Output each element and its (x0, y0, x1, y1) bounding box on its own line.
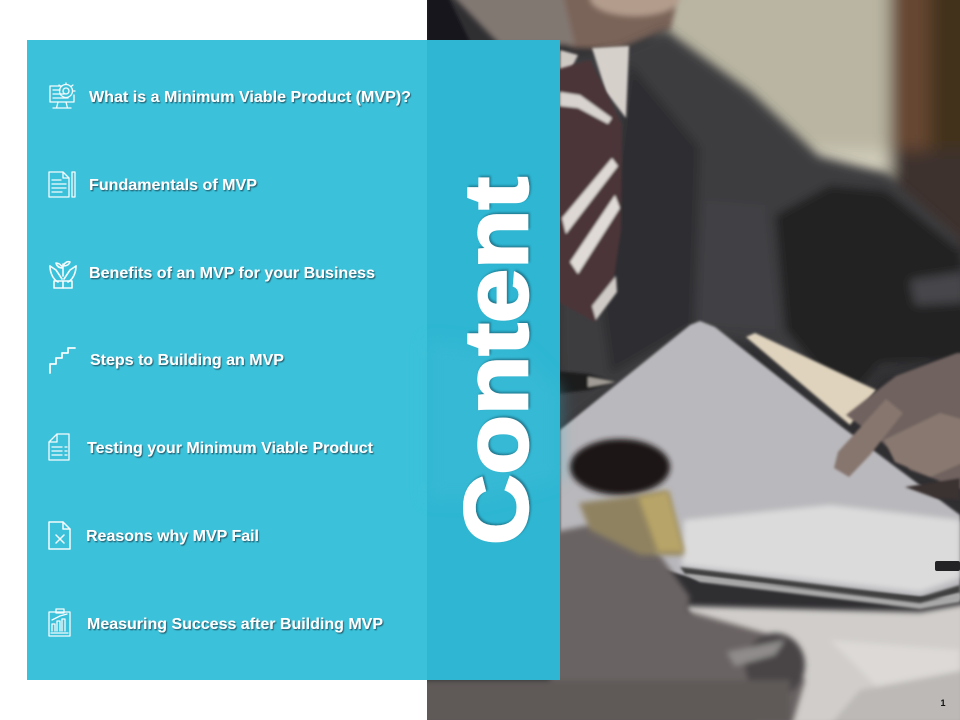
list item 1: What is a Minimum Viable Product: What is a Minimum Viable Product (MVP)? (89, 89, 411, 106)
striped tie (555, 60, 622, 322)
paper stack (560, 321, 960, 609)
list item 5: Testing your Minimum Viable Product (49, 434, 373, 460)
suit jacket (555, 30, 960, 430)
icon: document with cross (49, 522, 70, 549)
list item 4: Steps to Building an MVP (50, 348, 284, 373)
list item 6: Reasons why MVP Fail (49, 522, 259, 549)
list item 5: Testing your Minimum Viable Product: Testing your Minimum Viable Product (87, 440, 373, 457)
list item 6: Reasons why MVP Fail: Reasons why MVP Fail (86, 528, 259, 545)
table surface (684, 604, 960, 720)
pen nib (555, 371, 616, 394)
list item 1: What is a Minimum Viable Product (50, 83, 411, 108)
foreground grey shape (420, 519, 805, 720)
list item 2: Fundamentals of MVP (49, 172, 257, 197)
page number: 1 (940, 698, 946, 708)
background photo: businessman with documents and gavel (420, 0, 960, 720)
hand holding page (834, 353, 960, 500)
gavel (570, 439, 684, 555)
black corner behind collar (427, 0, 470, 42)
shirt collar and neck (447, 0, 680, 50)
list item 3: Benefits of an MVP for your Business: Benefits of an MVP for your Business (89, 265, 375, 282)
window background (660, 0, 960, 250)
list item 4: Steps to Building an MVP: Steps to Building an MVP (90, 352, 284, 369)
yellow notebook (746, 333, 876, 425)
heading: Content: Content (447, 177, 547, 545)
list item 2: Fundamentals of MVP: Fundamentals of MVP (89, 177, 257, 194)
icon: gear and monitor (50, 83, 75, 108)
icon: document and pencil (49, 172, 75, 197)
list item 7: Measuring Success after Building MVP: Measuring Success after Building MVP (87, 616, 383, 633)
list item 7: Measuring Success after Building MVP (49, 609, 383, 636)
icon: checklist document (49, 434, 69, 460)
shirt (560, 46, 629, 118)
icon: staircase (50, 348, 75, 373)
icon: hands holding plant and gift (50, 262, 76, 288)
icon: clipboard with bar chart (49, 609, 70, 636)
list item 3: Benefits of an MVP for your Business (50, 262, 375, 288)
panel: table of contents (27, 40, 560, 680)
